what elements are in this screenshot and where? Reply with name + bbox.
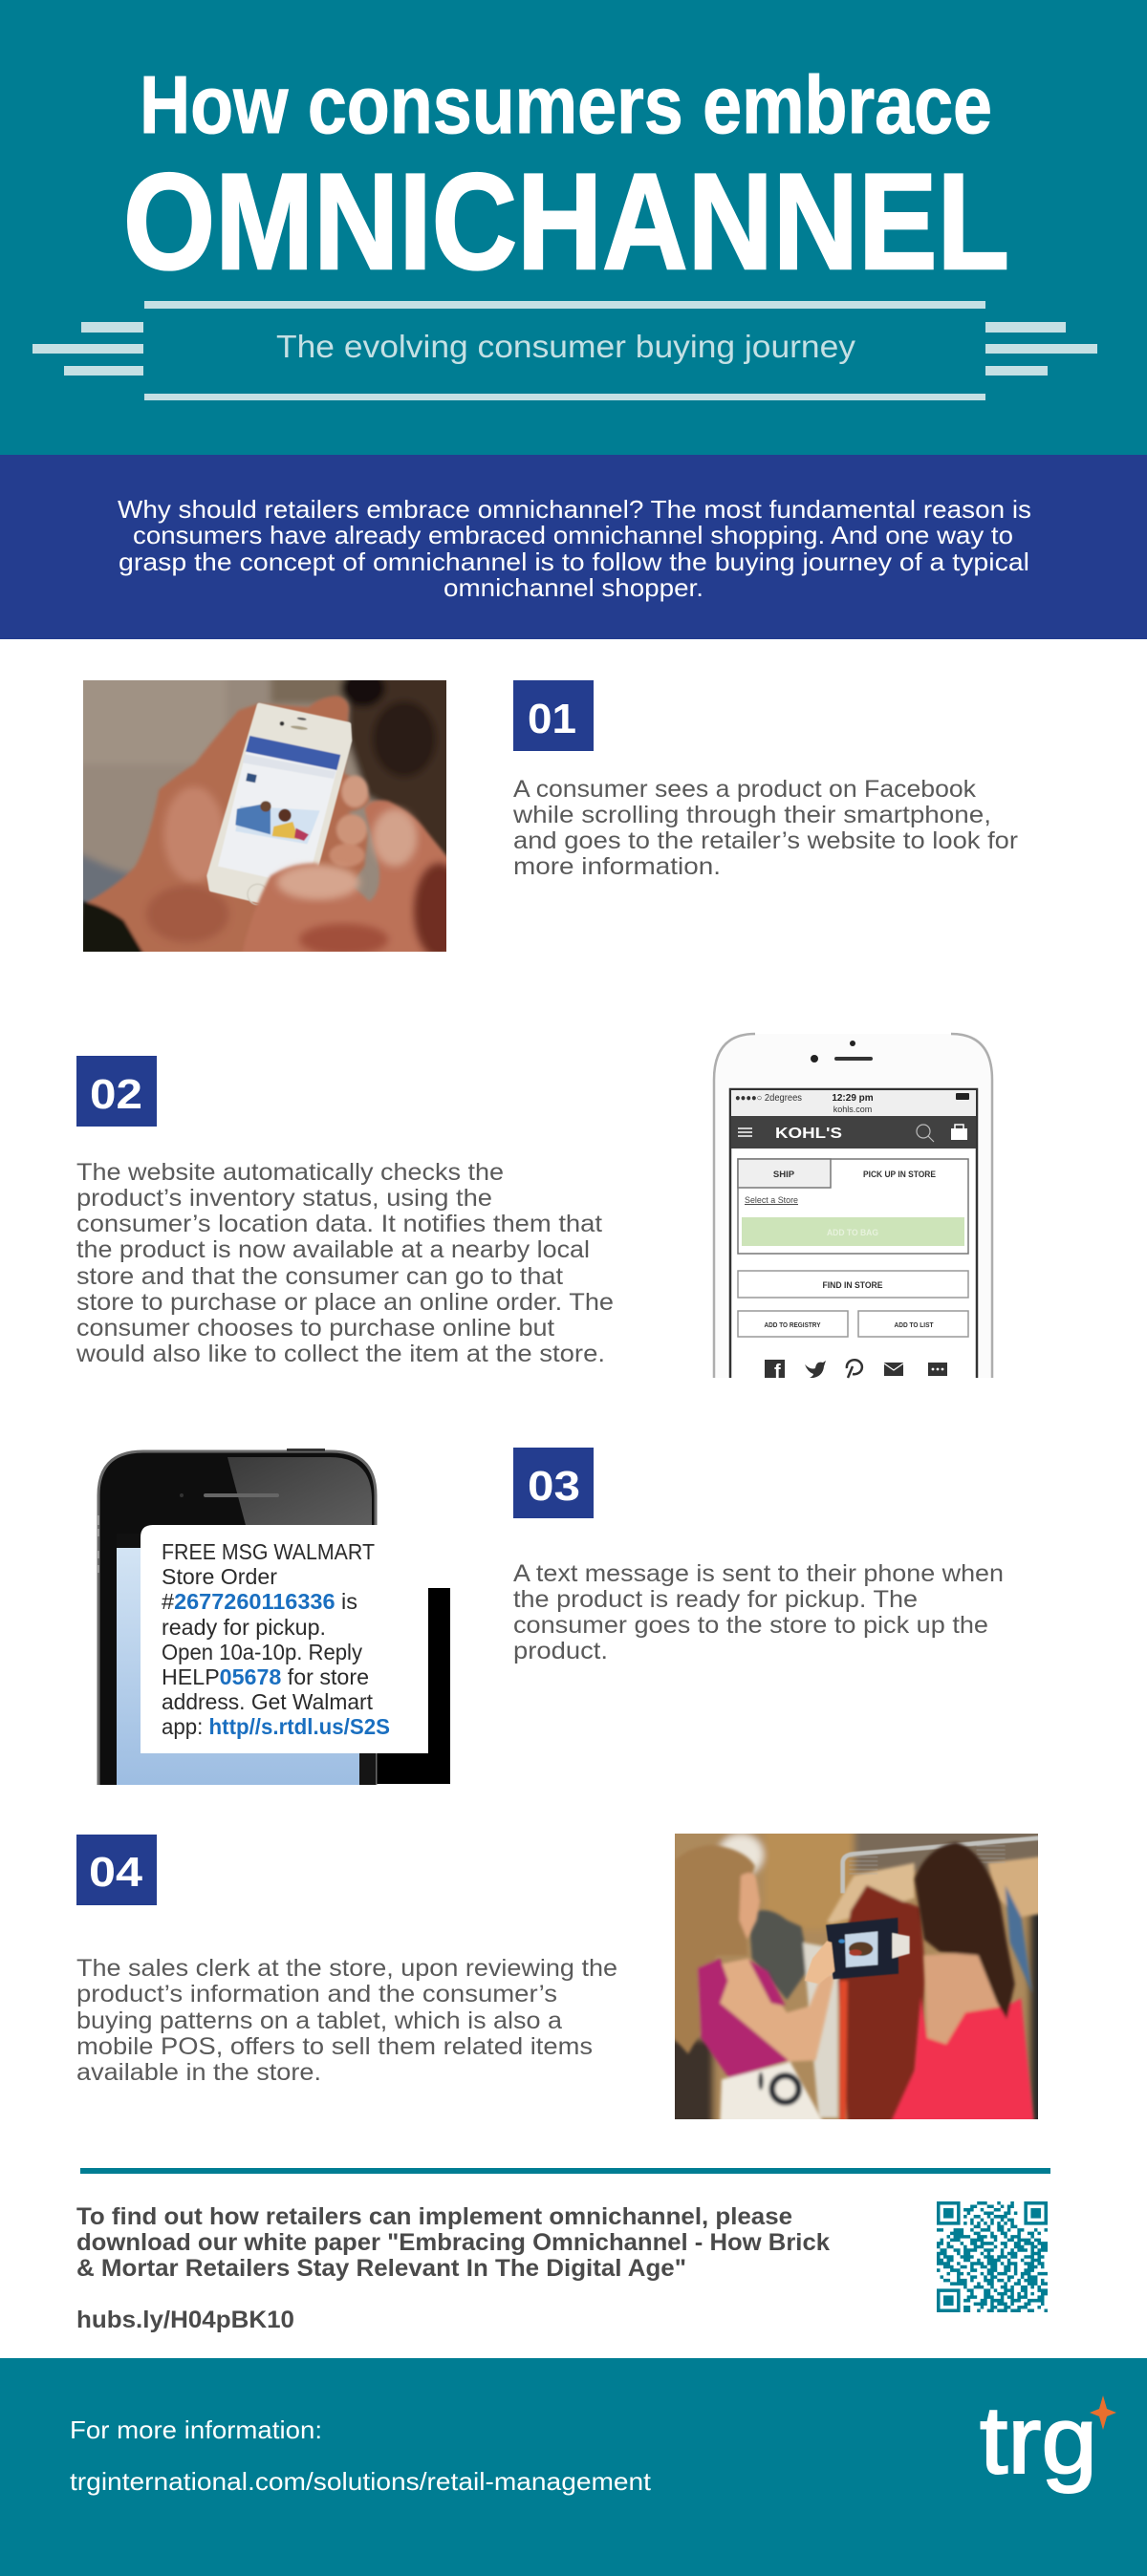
step 03 number badge — [513, 1448, 594, 1518]
phone mockup: Kohl's pick up in store screen: PICK UP IN STORE — [863, 1170, 936, 1180]
phone mockup: Kohl's pick up in store screen: Select a Store — [745, 1195, 798, 1206]
message bubble: Store Order — [162, 1564, 277, 1589]
short link: hubs.ly/H04pBK10 — [76, 2307, 294, 2333]
message bubble: address. Get Walmart — [162, 1689, 374, 1714]
message bubble: Open 10a-10p. Reply — [162, 1640, 362, 1664]
step 02 text: the product is now available at a nearby local — [76, 1236, 590, 1263]
step 02 text: would also like to collect the item at the store. — [76, 1341, 605, 1367]
step 02 number badge — [76, 1056, 157, 1127]
step 01 text: A consumer sees a product on Facebook — [513, 776, 977, 803]
message bubble: ready for pickup. — [162, 1615, 326, 1640]
photo: hands holding smartphone with Facebook feed — [83, 680, 446, 952]
step 02 text: store and that the consumer can go to that — [76, 1263, 563, 1290]
white paper call to action: To find out how retailers can implement omnichannel, please — [76, 2203, 792, 2230]
white paper call to action: download our white paper "Embracing Omnichannel - How Brick — [76, 2229, 830, 2256]
title line 2: OMNICHANNEL — [123, 146, 1009, 298]
subtitle: The evolving consumer buying journey — [276, 329, 856, 364]
step 01 number badge: 01 — [528, 696, 576, 742]
step 02 text — [76, 1159, 614, 1367]
white paper call to action — [76, 2203, 830, 2333]
step 02 text: consumer’s location data. It notifies them that — [76, 1211, 602, 1237]
QR code — [937, 2203, 1048, 2310]
phone mockup: Kohl's pick up in store screen: KOHL'S — [775, 1126, 842, 1142]
header panel — [0, 0, 1147, 455]
step 04 number badge — [76, 1835, 157, 1905]
footer panel — [0, 2358, 1147, 2576]
message bubble: app: http//s.rtdl.us/S2S — [162, 1714, 390, 1739]
icon: social share row — [765, 1360, 947, 1383]
message bubble: FREE MSG WALMART — [162, 1539, 375, 1564]
step 01 number badge — [513, 680, 594, 751]
phone mockup: Kohl's pick up in store screen: 12:29 pm — [832, 1093, 874, 1104]
step 03 text — [513, 1560, 1004, 1664]
logo: trg with orange star: trg — [980, 2387, 1097, 2494]
step 04 text: product’s information and the consumer’s — [76, 1981, 557, 2007]
step 04 text: buying patterns on a tablet, which is also a — [76, 2007, 562, 2034]
step 01 text — [512, 776, 1018, 880]
step 03 text: the product is ready for pickup. The — [513, 1586, 918, 1613]
divider rule — [80, 2168, 1050, 2174]
step 03 number badge: 03 — [528, 1463, 580, 1510]
step 04 text: The sales clerk at the store, upon reviewing the — [76, 1955, 617, 1982]
step 03 text: A text message is sent to their phone when — [513, 1560, 1004, 1587]
footer url: trginternational.com/solutions/retail-management — [70, 2467, 652, 2496]
footer label: For more information: — [70, 2415, 322, 2444]
step 02 number badge: 02 — [90, 1071, 142, 1118]
phone mockup: Kohl's pick up in store screen: ADD TO LIST — [895, 1320, 934, 1329]
step 04 text: mobile POS, offers to sell them related items — [76, 2033, 593, 2060]
step 01 text: while scrolling through their smartphone, — [512, 802, 991, 828]
step 01 text: more information. — [513, 853, 721, 880]
intro text — [118, 495, 1031, 602]
phone mockup: Kohl's pick up in store screen: FIND IN STORE — [822, 1280, 883, 1291]
phone mockup: Kohl's pick up in store screen: SHIP — [773, 1170, 795, 1180]
intro text: Why should retailers embrace omnichannel? The most fundamental reason is — [118, 495, 1031, 524]
message bubble: HELP05678 for store — [162, 1664, 369, 1689]
intro text: consumers have already embraced omnichannel shopping. And one way to — [133, 521, 1013, 549]
step 04 text: available in the store. — [76, 2059, 321, 2086]
phone mockup: Kohl's pick up in store screen: ADD TO BAG — [827, 1228, 878, 1238]
intro text: omnichannel shopper. — [444, 573, 703, 602]
intro panel — [0, 455, 1147, 639]
phone mockup: Kohl's pick up in store screen: kohls.com — [833, 1105, 872, 1114]
phone mockup: Kohl's pick up in store screen: ●●●●○ 2degrees — [735, 1093, 802, 1104]
phone mockup: Kohl's pick up in store screen: ADD TO REGISTRY — [765, 1320, 820, 1329]
step 02 text: product’s inventory status, using the — [76, 1185, 492, 1212]
icon: social share row: f — [774, 1362, 781, 1383]
step 03 text: consumer goes to the store to pick up the — [513, 1612, 988, 1639]
step 01 text: and goes to the retailer’s website to look for — [513, 827, 1018, 854]
step 04 number badge: 04 — [89, 1849, 143, 1896]
message bubble: #2677260116336 is — [162, 1589, 357, 1614]
phone mockup: Walmart pickup text message — [97, 1449, 450, 1785]
title line 1: How consumers embrace — [140, 60, 992, 151]
subtitle frame lines — [32, 301, 1097, 400]
photo: shoppers with a tablet in a clothing store — [675, 1834, 1038, 2119]
step 04 text — [76, 1955, 617, 2086]
step 03 text: product. — [513, 1638, 608, 1664]
step 02 text: consumer chooses to purchase online but — [76, 1315, 554, 1342]
step 02 text: store to purchase or place an online order. The — [76, 1289, 614, 1316]
white paper call to action: & Mortar Retailers Stay Relevant In The Digital Age" — [76, 2255, 686, 2282]
step 02 text: The website automatically checks the — [76, 1159, 504, 1186]
phone mockup: Kohl's pick up in store screen — [714, 1034, 992, 1383]
message bubble — [141, 1525, 427, 1753]
intro text: grasp the concept of omnichannel is to follow the buying journey of a typical — [119, 547, 1029, 576]
